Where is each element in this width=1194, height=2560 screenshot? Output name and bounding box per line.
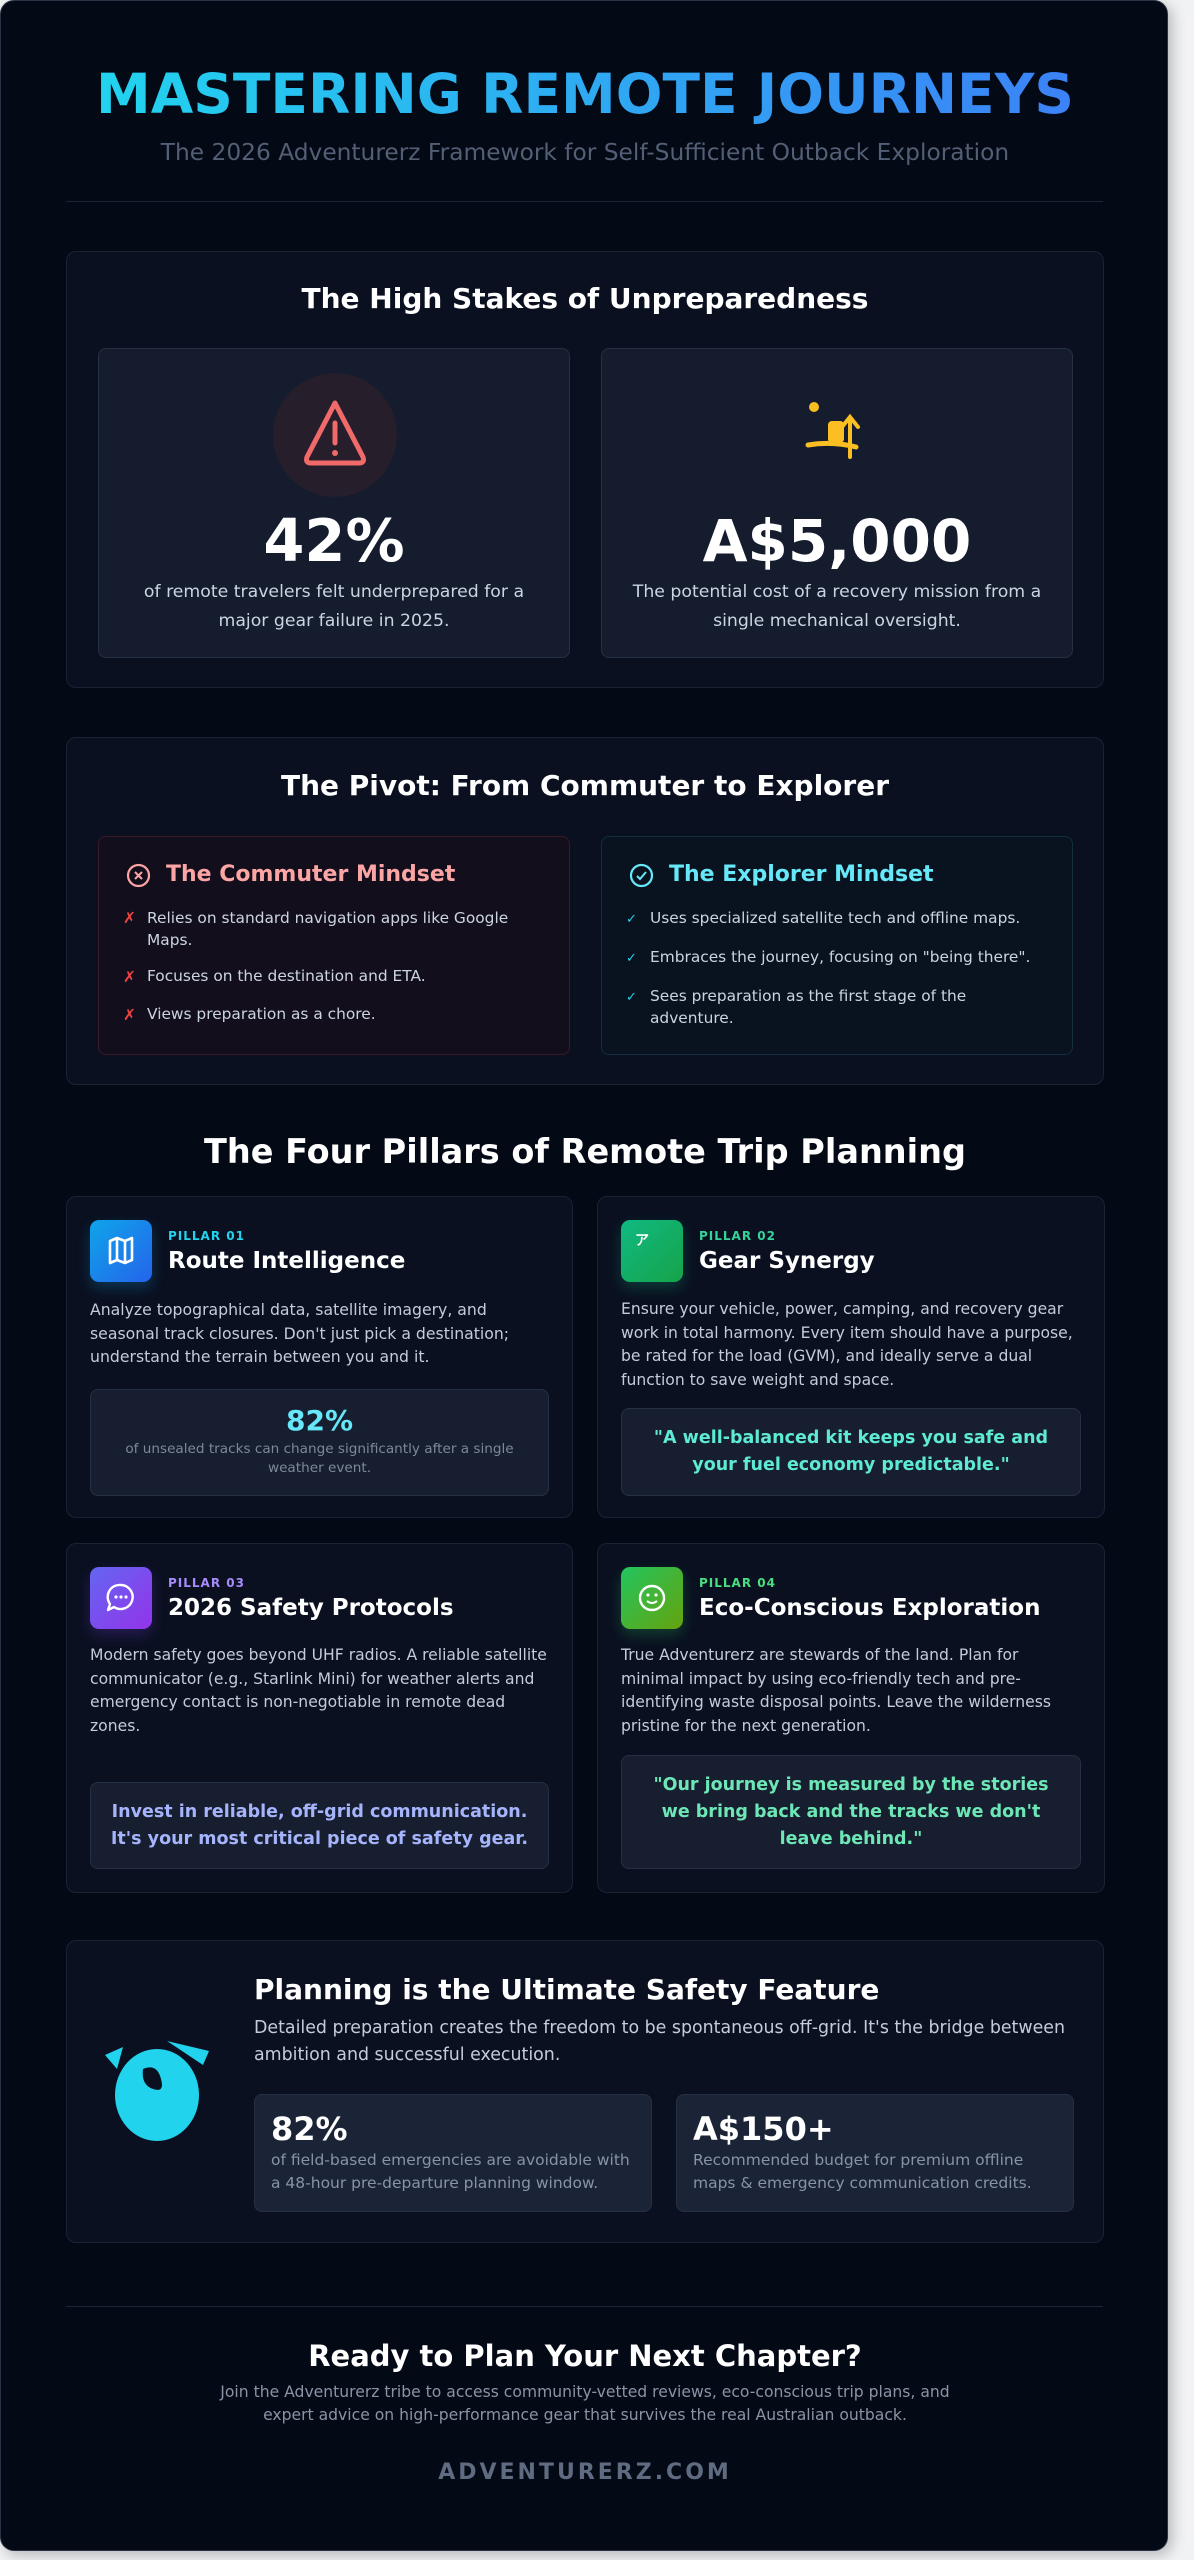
stat box: 82%: of unsealed tracks can change significantly after a single [125,1441,514,1457]
icon: warning [273,373,397,497]
card: explorer mindset: adventure. [650,1009,734,1027]
pillar title: Gear Synergy [699,1248,875,1274]
description: Modern safety goes beyond UHF radios. A reliable satellite [90,1646,547,1664]
CTA text: expert advice on high-performance gear that survives the real Australian outback. [263,2406,907,2424]
CTA text [219,2383,950,2424]
quote box: we bring back and the tracks we don't [662,1802,1040,1822]
callout box [90,1782,549,1869]
label: PILLAR 02 [699,1229,776,1243]
label: PILLAR 01 [168,1229,245,1243]
description [90,1646,547,1734]
card: explorer mindset: ✓ [626,912,637,927]
icon: chat [90,1567,152,1629]
description: pristine for the next generation. [621,1716,871,1734]
heading: Planning is the Ultimate Safety Feature [254,1973,879,2006]
description: understand the terrain between you and it. [90,1347,429,1366]
label: PILLAR 04 [699,1576,776,1590]
description: function to save weight and space. [621,1370,894,1388]
card: commuter mindset: Maps. [147,931,192,949]
card: commuter mindset: Views preparation as a chore. [147,1005,376,1023]
stat: A$150+ [676,2094,1074,2212]
pillar title: Route Intelligence [168,1248,405,1274]
stat box: 82% [90,1389,549,1496]
description: ambition and successful execution. [254,2045,560,2065]
list: commuter [123,909,508,1024]
panel: high stakes [66,251,1104,688]
card: commuter mindset: ✗ [123,1006,136,1024]
title: MASTERING REMOTE JOURNEYS [96,62,1074,126]
header: explorer: The Explorer Mindset [669,862,934,887]
number 42%: 42% [263,506,405,575]
card: explorer mindset: ✓ [626,951,637,966]
card: explorer mindset: Sees preparation as the first stage of the [650,987,966,1005]
callout box: It's your most critical piece of safety gear. [111,1829,528,1849]
caption [632,582,1041,631]
caption: major gear failure in 2025. [218,611,450,631]
heading: high stakes: The High Stakes of Unpreparedness [302,282,868,315]
subtitle: The 2026 Adventurerz Framework for Self-Sufficient Outback Exploration [161,139,1009,166]
card: commuter mindset: Relies on standard navigation apps like Google [147,909,508,927]
pillar 03 [66,1543,573,1893]
card: commuter mindset: ✗ [123,968,136,986]
pillar 01 [66,1196,573,1518]
header: commuter: The Commuter Mindset [166,862,455,887]
stat: A$150+: maps & emergency communication credits. [693,2174,1032,2192]
callout box: Invest in reliable, off-grid communication. [112,1802,527,1822]
stat box: 82%: weather event. [268,1460,371,1476]
description: Ensure your vehicle, power, camping, and recovery gear [621,1300,1063,1318]
stat: A$150+: Recommended budget for premium offline [693,2151,1023,2169]
pillar title: Eco-Conscious Exploration [699,1595,1040,1621]
caption [144,582,524,631]
card: commuter mindset: Focuses on the destination and ETA. [147,967,426,985]
caption: The potential cost of a recovery mission from a [633,582,1041,602]
stat card: 42% [98,348,570,658]
caption: of remote travelers felt underprepared for a [144,582,524,602]
quote box: "A well-balanced kit keeps you safe and [654,1428,1048,1448]
heading: four pillars: The Four Pillars of Remote Trip Planning [204,1132,966,1171]
description: emergency contact is non-negotiable in remote dead [90,1693,505,1711]
heading: pivot: The Pivot: From Commuter to Explorer [281,769,889,802]
description: Analyze topographical data, satellite imagery, and [90,1300,487,1319]
number A$5,000: A$5,000 [703,507,971,575]
pillar 02 [597,1196,1105,1518]
card: explorer mindset: Embraces the journey, focusing on "being there". [650,948,1030,966]
icon: recovery [806,402,860,459]
icon: map [90,1220,152,1282]
description [254,2018,1065,2065]
card: explorer mindset: ✓ [626,990,637,1005]
quote box [621,1755,1081,1869]
description: Detailed preparation creates the freedom to be spontaneous off-grid. It's the bridge between [254,2018,1065,2038]
description: seasonal track closures. Don't just pick a destination; [90,1324,509,1342]
CTA heading: Ready to Plan Your Next Chapter? [308,2339,862,2373]
description: communicator (e.g., Starlink Mini) for weather alerts and [90,1670,534,1688]
panel: pivot [66,737,1104,1085]
card: explorer mindset: Uses specialized satellite tech and offline maps. [650,909,1020,927]
description: identifying waste disposal points. Leave the wilderness [621,1693,1051,1711]
description: zones. [90,1716,140,1734]
CTA text: Join the Adventurerz tribe to access community-vetted reviews, eco-conscious trip plans, and [220,2383,950,2401]
icon: smile [621,1567,683,1629]
description [621,1300,1073,1388]
panel: planning safety [66,1940,1104,2243]
stat card: A$5,000 [601,348,1073,658]
stat: A$150+: A$150+ [693,2110,834,2148]
footer brand: ADVENTURERZ.COM [438,2460,732,2485]
description: minimal impact by using eco-friendly tech and pre- [621,1670,1021,1688]
caption: single mechanical oversight. [713,611,961,631]
stat box: 82%: 82% [286,1404,353,1437]
icon: gear [621,1220,683,1282]
description [90,1300,509,1366]
list: explorer [626,909,1030,1027]
card: commuter mindset: ✗ [123,909,136,927]
card: commuter mindset [98,836,570,1055]
description: True Adventurerz are stewards of the land. Plan for [621,1646,1018,1664]
quote box: "Our journey is measured by the stories [653,1775,1049,1795]
quote box: leave behind." [780,1829,922,1849]
quote box [621,1408,1081,1496]
icon: gear: ア [635,1233,649,1249]
quote box: your fuel economy predictable." [692,1455,1010,1475]
pillar title: 2026 Safety Protocols [168,1595,454,1621]
icon: globe blob [105,2041,209,2141]
card: explorer mindset [601,836,1073,1055]
stat: 82% [254,2094,652,2212]
description [620,1646,1051,1734]
stat: 82%: 82% [271,2110,348,2148]
stat: 82%: a 48-hour pre-departure planning window. [271,2174,598,2192]
pillar 04 [597,1543,1105,1893]
label: PILLAR 03 [168,1576,245,1590]
stat: 82%: of field-based emergencies are avoidable with [271,2151,630,2169]
description: work in total harmony. Every item should have a purpose, [621,1324,1073,1342]
description: be rated for the load (GVM), and ideally serve a dual [621,1347,1032,1365]
